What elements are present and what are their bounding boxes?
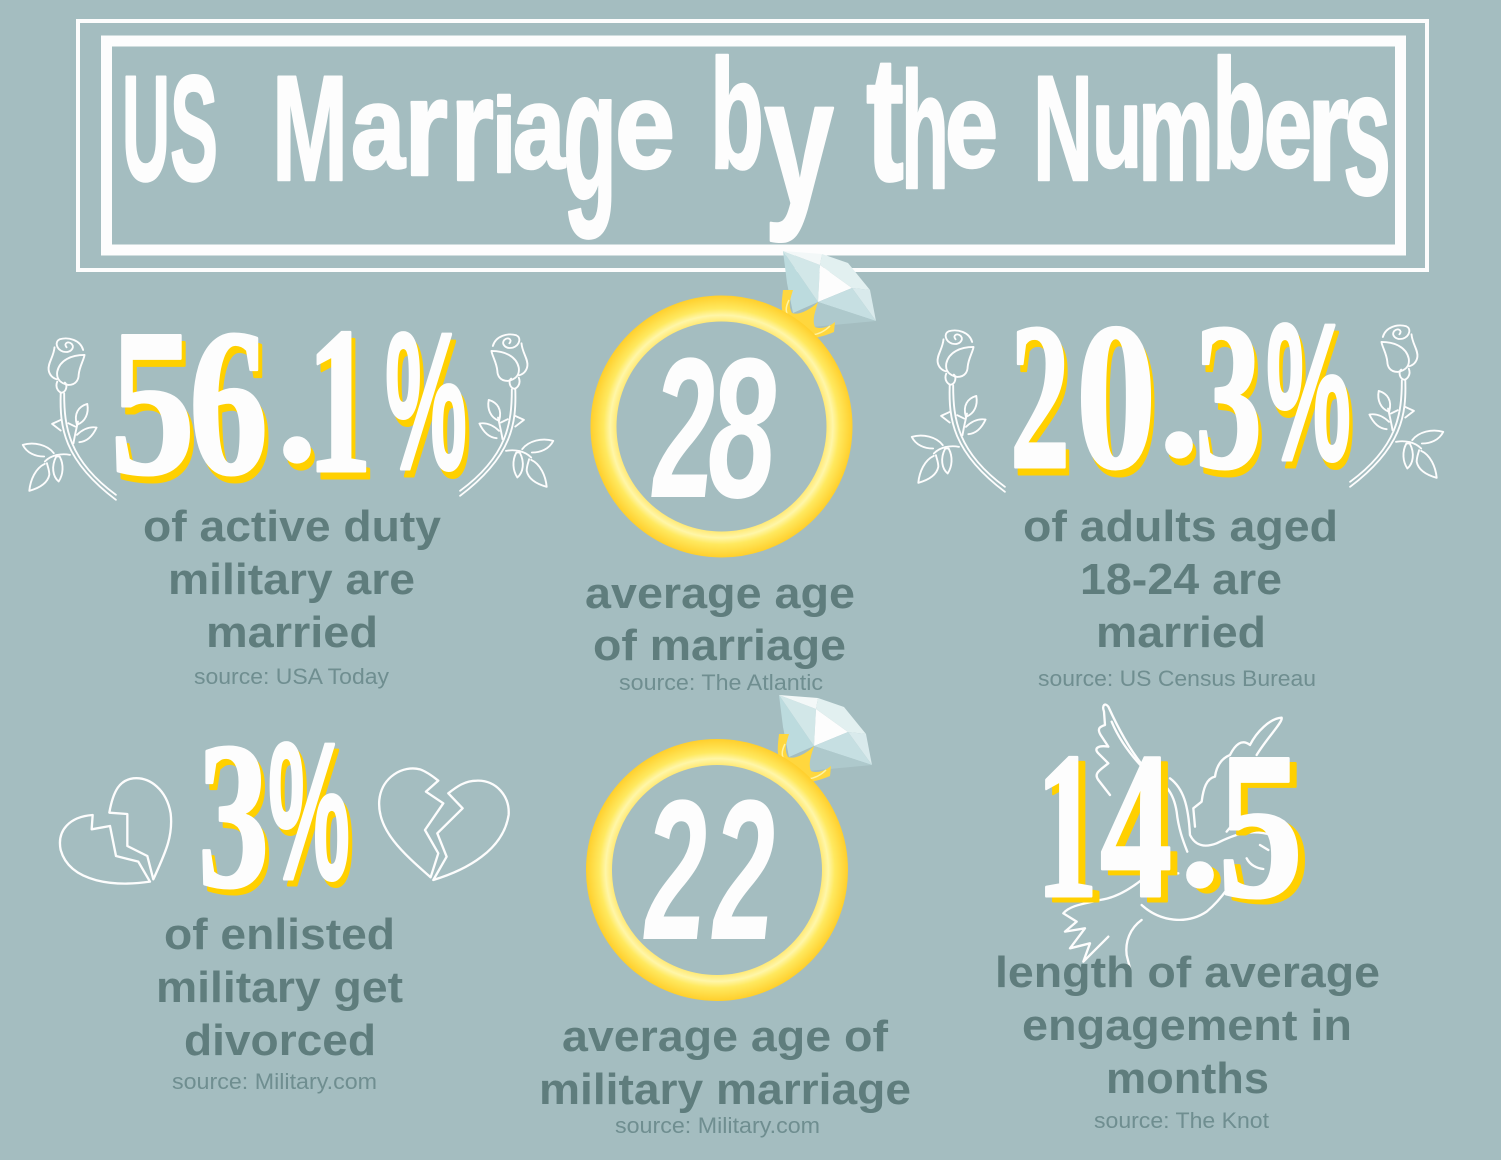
text: average age of military marriage: military marriage [539, 1065, 911, 1114]
icon: gold ring with diamond, 28 [604, 251, 876, 544]
icon: rose right of 20.3% [1350, 325, 1443, 487]
text: average age of military marriage: source: Military.com [615, 1113, 820, 1138]
title: i [492, 77, 516, 195]
title: S [170, 44, 218, 212]
stat: 14.5: 5 [1225, 715, 1310, 947]
stat: 14.5: 4 [1100, 710, 1172, 942]
text: % [268, 702, 350, 921]
text: adults aged 18-24: married [1096, 608, 1266, 657]
title: m [1138, 52, 1214, 211]
title [122, 19, 1391, 243]
stat: 20.3%: 0 [1076, 281, 1156, 513]
stat: 28: 2 [651, 317, 715, 540]
stat: 56.1%: 1 [311, 292, 376, 524]
text: % [272, 708, 354, 927]
text: enlisted military divorced: military get [156, 963, 403, 1012]
stat: 56.1%: . [282, 334, 320, 500]
stat: 14.5: . [1181, 752, 1219, 918]
icon: gold ring with diamond, 22 [599, 695, 872, 988]
title: r [404, 51, 448, 205]
icon: rose right of 56.1% [460, 334, 553, 496]
text: % [385, 292, 467, 511]
stat: 20.3%: 3 [1195, 281, 1262, 513]
title: r [1307, 47, 1349, 212]
stat: 20.3%: 3 [1198, 288, 1266, 520]
text: s [1343, 33, 1391, 232]
text: enlisted military divorced: of enlisted [164, 910, 395, 959]
title: U [122, 44, 170, 212]
stat: 20.3% [1010, 281, 1354, 520]
text: adults aged 18-24: of adults aged [1023, 502, 1338, 551]
text: average age of marriage: source: The Atlantic [619, 670, 823, 695]
text: % [1270, 290, 1354, 509]
text: % [389, 299, 471, 518]
text: enlisted military divorced [156, 910, 403, 1094]
text: average age of military marriage: average age of [562, 1012, 888, 1061]
text: adults aged 18-24: 18-24 are [1080, 555, 1282, 604]
title frame [78, 21, 1427, 270]
stat: 20.3%: % [1266, 283, 1351, 502]
icon: dove [1063, 705, 1282, 968]
text: active duty military: military are [168, 555, 415, 604]
title: e [945, 57, 998, 193]
text: adults aged 18-24 [1023, 502, 1338, 691]
text: average age of marriage: average age [585, 569, 855, 618]
stat: 14.5: 1 [1043, 715, 1105, 947]
stat: 56.1%: 6 [189, 287, 268, 519]
stat: 56.1%: 6 [193, 294, 272, 526]
text: length of engagement: source: The Knot [1094, 1108, 1269, 1133]
icon: rose left of 20.3% [912, 330, 1005, 492]
text: active duty military [143, 502, 442, 689]
text: length of engagement: months [1106, 1054, 1269, 1103]
stat: 56.1%: . [278, 327, 316, 493]
stat: 14.5: . [1188, 757, 1226, 923]
text: active duty military: source: USA Today [194, 664, 389, 689]
title: h [901, 39, 949, 224]
stat: 20.3%: . [1164, 329, 1202, 495]
stat: 3%: 3 [198, 700, 269, 932]
title: M [272, 44, 348, 212]
icon: broken heart left [60, 778, 171, 884]
text: length of engagement: engagement in [1022, 1001, 1352, 1050]
stat: 20.3%: 0 [1080, 288, 1160, 520]
text: active duty military: of active duty [143, 502, 442, 551]
stat: 56.1%: 5 [110, 287, 195, 519]
stat: 14.5: 1 [1036, 710, 1098, 942]
icon: broken heart right [379, 768, 509, 880]
stat: 14.5: 4 [1107, 715, 1179, 947]
title: t [866, 19, 904, 218]
stat: 20.3%: 2 [1014, 288, 1074, 520]
title: a [513, 62, 566, 194]
stat: 3%: 3 [202, 706, 273, 938]
title: y [764, 39, 834, 243]
text: active duty military: married [206, 608, 378, 657]
title: a [351, 62, 406, 194]
text: average age of military marriage [539, 1012, 911, 1138]
title: N [1033, 44, 1093, 212]
text: average age of marriage [585, 569, 855, 695]
text: average age of marriage: of marriage [593, 621, 846, 670]
stat: 28: 8 [708, 317, 776, 540]
title: e [615, 58, 675, 195]
stat: 22: 2 [643, 759, 707, 982]
text: enlisted military divorced: divorced [184, 1016, 376, 1065]
title: u [1092, 65, 1142, 192]
stat: 14.5 [1036, 710, 1310, 947]
stat: 20.3%: . [1160, 322, 1198, 488]
title: e [1264, 57, 1312, 193]
title: g [563, 30, 617, 239]
title: b [1212, 28, 1266, 202]
stat: 22: 2 [711, 759, 775, 982]
title: r [450, 47, 494, 212]
text: enlisted military divorced: source: Military.com [172, 1069, 377, 1094]
stat: 56.1%: 1 [307, 285, 372, 517]
stat: 56.1%: 5 [114, 294, 199, 526]
stat: 3% [198, 700, 354, 938]
icon: rose left of 56.1% [23, 338, 116, 500]
title: b [710, 28, 764, 202]
stat: 20.3%: 2 [1010, 281, 1070, 513]
text: length of engagement: length of average [995, 948, 1380, 997]
text: adults aged 18-24: source: US Census Bureau [1038, 666, 1316, 691]
stat: 14.5: 5 [1218, 710, 1303, 942]
stat: 56.1% [110, 285, 471, 526]
text: length of engagement [995, 948, 1380, 1133]
